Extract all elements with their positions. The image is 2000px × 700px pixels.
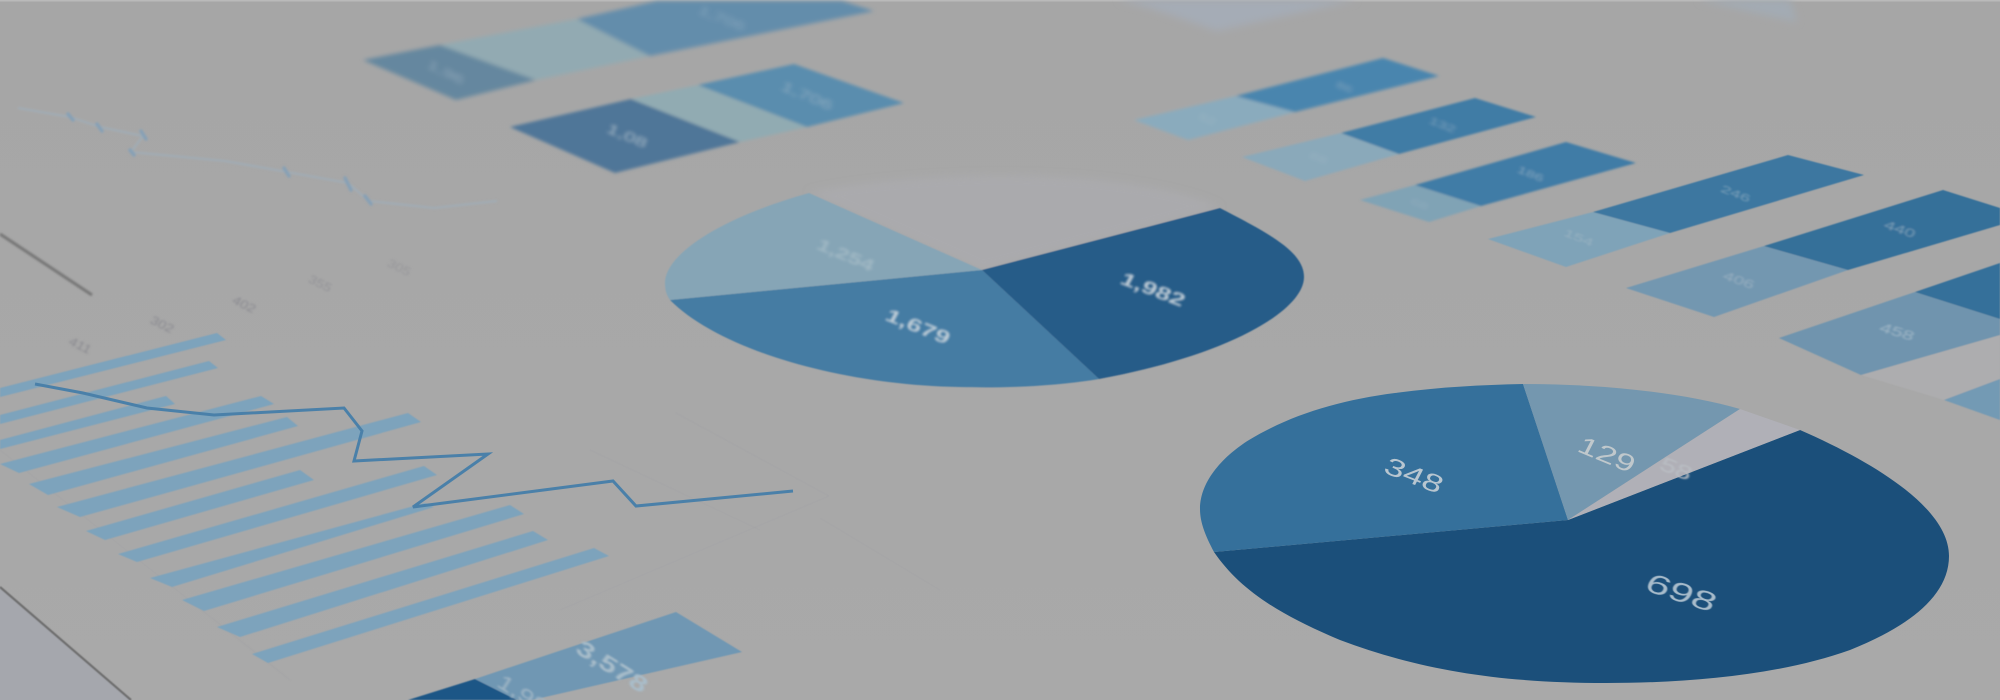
stacked bar B: 1,706 [779, 79, 835, 113]
stacked bar 2: 132 [1428, 115, 1458, 135]
stacked bar 3: 68 [1409, 196, 1430, 212]
stacked bar B [510, 64, 904, 173]
stacked bar A: 1,706 [696, 4, 747, 34]
data point ticks [68, 114, 371, 204]
slice: light blue [665, 193, 982, 300]
value labels: 129 [1573, 432, 1640, 478]
slice: navy 698 [1214, 430, 1949, 683]
stacked bar 6: 458 [1877, 320, 1917, 344]
pie chart 2 [1200, 384, 1949, 683]
value labels: 1,982 [1117, 268, 1189, 310]
horizontal bar chart [0, 333, 609, 663]
stacked bar 5: 406 [1721, 270, 1757, 292]
slice: blue 348 [1200, 384, 1568, 552]
stacked bar 1 [1134, 58, 1439, 140]
faint top charts [1118, 0, 1797, 31]
desk corner below paper edge [0, 587, 131, 700]
slice: dark blue [982, 208, 1304, 379]
slice: sliver 58 [1568, 409, 1800, 520]
stacked bar 4 [1488, 155, 1864, 267]
axis labels [66, 256, 414, 357]
pie chart 1 [665, 176, 1304, 387]
stacked bar 4: 246 [1718, 183, 1753, 205]
axis labels: 402 [230, 293, 259, 316]
blurred small line chart at upper left [18, 108, 497, 208]
stacked bar 3: 186 [1516, 164, 1546, 184]
axis labels: 302 [148, 313, 177, 336]
top highlight edge [0, 0, 2000, 2]
value labels: 348 [1379, 452, 1448, 499]
value labels: 58 [1656, 453, 1696, 485]
stacked bar 2: 88 [1308, 150, 1329, 166]
axis labels: 411 [66, 335, 94, 357]
diagonal rule at upper left [0, 234, 92, 295]
value labels [814, 237, 1189, 348]
stacked bar B: 1,08 [604, 121, 650, 151]
stacked bar 1: 52 [1197, 112, 1217, 127]
faint chart gridlines [0, 413, 940, 680]
stacked bar 1: 86 [1334, 80, 1354, 95]
axis labels: 305 [385, 256, 414, 279]
value labels: 1,679 [882, 305, 954, 348]
stacked bar 2 [1242, 98, 1536, 181]
axis labels: 355 [306, 272, 335, 295]
slice: mid blue [670, 270, 1099, 387]
stacked bar A [363, 1, 874, 100]
value labels [1379, 432, 1723, 618]
bottom stacked bar: 3,578 [572, 635, 653, 698]
slice: pale [809, 176, 1220, 270]
line chart overlay [35, 384, 793, 507]
bottom stacked bar [408, 612, 742, 700]
slice: light 129 [1523, 384, 1740, 520]
stacked bar A: 1,96 [425, 57, 466, 87]
value labels: 1,254 [814, 237, 878, 275]
stacked bar 3 [1360, 142, 1636, 222]
stacked bar 5: 440 [1882, 219, 1918, 241]
stacked bar 4: 154 [1561, 227, 1596, 250]
stacked bar 5 [1626, 190, 2000, 317]
stacked bar 6 [1779, 263, 2000, 420]
value labels: 698 [1640, 567, 1723, 618]
